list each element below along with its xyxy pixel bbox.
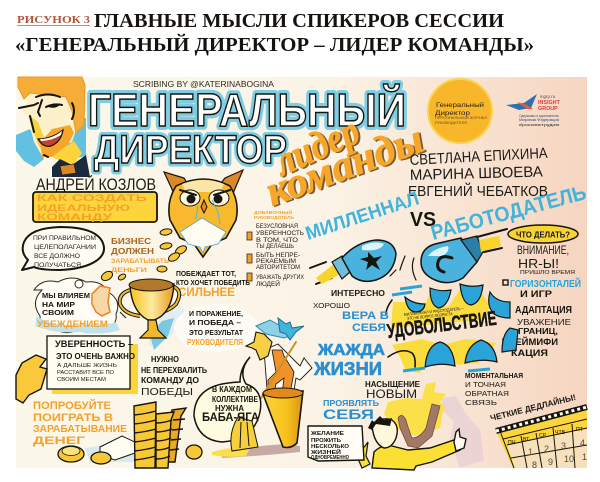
heading: clear deadlines: ЧЕТКИЕ ДЕДЛАЙНЫ! <box>489 391 577 423</box>
oval label: what to do <box>508 225 578 243</box>
speakers names <box>408 145 548 200</box>
word cloud: values: ЖАЖДА <box>317 342 385 359</box>
heading: ГЕНЕРАЛЬНЫЙ ДИРЕКТОР: ДИРЕКТОР <box>94 128 287 172</box>
thought bubble: beliefs: НА МИР <box>42 300 75 309</box>
illustration: calendar: 1 <box>528 447 533 457</box>
logo: Insight Group: INSIGHT <box>538 100 561 106</box>
list: what a leader does: УВЕРЕННОСТЬ <box>256 230 304 237</box>
script heading: лидер команды: команды <box>262 117 431 216</box>
heading: миллениал vs работодатель: МИЛЛЕННАЛ <box>303 188 422 245</box>
list: attention HR: И ИГР <box>520 288 552 299</box>
list: what a leader does: БЫТЬ НЕПРЕ- <box>256 252 300 259</box>
illustration: trophy <box>120 279 184 350</box>
list: what a leader does: РЕКАЕМЫМ <box>256 258 296 265</box>
text: business must earn: БИЗНЕС <box>111 237 151 246</box>
note: confidence <box>47 336 138 394</box>
logo: Insight Group <box>506 94 561 127</box>
heading: ГЕНЕРАЛЬНЫЙ ДИРЕКТОР <box>88 84 406 172</box>
oval label: what to do: ЧТО ДЕЛАТЬ? <box>516 230 570 240</box>
list: what a leader does: БЕЗУСЛОВНАЯ <box>256 223 298 230</box>
speakers names: СВЕТЛАНА ЕПИХИНА <box>409 145 548 169</box>
speech bubble: every team needs Baba Yaga: НУЖНА <box>215 404 244 413</box>
note: confidence: РАССТАВИТ ВСЕ ПО <box>57 370 114 376</box>
word cloud: values: СЕБЯ <box>323 406 374 422</box>
text: try playing <box>33 399 127 447</box>
callout: how to build a team: КОМАНДУ <box>37 212 113 222</box>
title: ГЛАВНЫЕ МЫСЛИ СПИКЕРОВ СЕССИИ <box>94 10 504 32</box>
list: attention HR: КАЦИЯ <box>511 348 548 358</box>
text: don't over-praise: КОМАНДУ ДО <box>141 376 199 385</box>
list: attention HR: ПРИШЛО ВРЕМЯ <box>520 270 575 276</box>
text: instant feedback: МОМЕНТАЛЬНАЯ <box>465 373 523 380</box>
list: what a leader does: В ТОМ, ЧТО <box>256 237 298 244</box>
text: try playing: ДЕНЕГ <box>33 435 86 447</box>
illustration: coin stacks and cards <box>58 402 202 468</box>
note: confidence: УВЕРЕННОСТЬ – <box>55 338 133 349</box>
list: attention HR: УВАЖЕНИЕ <box>517 317 571 327</box>
badge: journal logo: ПЕРСОНАЛЬНЫЙ ЖУРНАЛ <box>435 116 487 120</box>
speech bubble: every team needs Baba Yaga <box>194 357 261 451</box>
illustration: calendar: 8 <box>532 460 537 470</box>
illustration: owl <box>164 170 243 257</box>
list: attention HR: HR-Ы! <box>518 256 559 271</box>
speech bubble: many lives: ЖИЗНЕЙ <box>310 448 341 456</box>
word cloud: values: СЕБЯ <box>352 322 386 334</box>
illustration: calendar: 10 <box>564 454 574 464</box>
word cloud: values: ВЕРА В <box>342 310 389 322</box>
list: what a leader does: ТЫ ДЕЛАЕШЬ <box>256 243 294 250</box>
illustration: calendar: 3 <box>561 441 566 451</box>
illustration: calendar: 4 <box>580 438 585 448</box>
illustration: pleasure burst: ЭТО НЕ ВОПРОС ВОЗРАСТА <box>407 311 453 321</box>
thought bubble: beliefs: УБЕЖДЕНИЕМ <box>37 319 108 330</box>
text: don't over-praise: ПОБЕДЫ <box>141 387 193 398</box>
thought bubble: beliefs: СВОИМ <box>42 308 74 317</box>
title <box>15 10 534 56</box>
text: try playing: ПОИГРАТЬ В <box>33 412 113 424</box>
list: attention HR: ГОРИЗОНТАЛЕЙ <box>510 277 581 290</box>
speech bubble: goal setting <box>22 227 104 270</box>
heading: миллениал vs работодатель: VS <box>410 209 436 231</box>
heading: миллениал vs работодатель: РАБОТОДАТЕЛЬ <box>428 181 589 245</box>
illustration: calendar: ПН <box>508 440 516 446</box>
illustration: Baba Yaga <box>212 318 312 458</box>
logo: Insight Group: Мировая Федерация <box>519 118 559 122</box>
word cloud: values: ПРОЯВЛЯТЬ <box>323 398 379 408</box>
thought bubble: beliefs <box>34 278 126 334</box>
list: what a leader does: УВАЖАТЬ ДРУГИХ <box>256 274 305 281</box>
text: try playing: ПОПРОБУЙТЕ <box>33 399 111 412</box>
speech bubble: goal setting: ПРИ ПРАВИЛЬНОМ <box>33 235 96 242</box>
text: instant feedback <box>465 373 523 407</box>
list: what a leader does: ДОБАВОЧНЫЙ <box>254 208 293 216</box>
credit: SCRIBING BY @KATERINABOGINA <box>133 80 275 89</box>
illustration: calendar <box>496 407 587 470</box>
illustration: pointing arm <box>16 355 47 403</box>
speech bubble: many lives: ЖЕЛАНИЕ <box>310 431 344 437</box>
text: defeat and victory: И ПОБЕДА – <box>189 318 241 327</box>
text: defeat and victory: РУКОВОДИТЕЛЯ <box>187 337 243 347</box>
illustration: calendar: 1 <box>582 452 587 462</box>
text: business must earn <box>111 237 169 274</box>
word cloud: values: ИНТЕРЕСНО <box>331 288 385 298</box>
speech bubble: many lives: НЕСКОЛЬКО <box>311 444 350 450</box>
badge: journal logo: РУКОВОДИТЕЛЯ <box>435 121 468 125</box>
heading: ГЕНЕРАЛЬНЫЙ ДИРЕКТОР: ДИРЕКТОР <box>94 128 287 172</box>
text: defeat and victory: И ПОРАЖЕНИЕ, <box>189 309 243 318</box>
title: «ГЕНЕРАЛЬНЫЙ ДИРЕКТОР – ЛИДЕР КОМАНДЫ» <box>15 33 534 56</box>
text: instant feedback: И ТОЧНАЯ <box>465 382 506 389</box>
speech bubble: goal setting: ПОЛУЧАТЬСЯ <box>34 262 81 269</box>
speakers names: МАРИНА ШВОЕВА <box>410 164 543 184</box>
text: instant feedback: ОБРАТНАЯ <box>465 391 509 398</box>
illustration: boxing gloves <box>310 229 507 284</box>
list: what a leader does: АВТОРИТЕТОМ <box>256 264 300 271</box>
text: the winner: КТО ХОЧЕТ ПОБЕДИТЬ <box>176 280 250 287</box>
text: don't over-praise: НЕ ПЕРЕХВАЛИТЬ <box>141 366 207 375</box>
list: attention HR: ВНИМАНИЕ, <box>517 243 569 257</box>
list: attention HR <box>503 243 581 358</box>
logo: Insight Group: ingrp.ru <box>540 94 556 99</box>
illustration: cheering man <box>356 382 484 470</box>
icon: floating coins <box>100 228 188 282</box>
word cloud: values: ЖИЗНИ <box>313 359 382 379</box>
note: confidence: А ДАЛЬШЕ ЖИЗНЬ <box>57 363 118 369</box>
heading: ГЕНЕРАЛЬНЫЙ ДИРЕКТОР: ГЕНЕРАЛЬНЫЙ <box>88 84 406 136</box>
text: the winner <box>176 271 250 299</box>
illustration: man portrait <box>16 77 90 177</box>
script heading: лидер команды: команды <box>260 116 430 215</box>
text: defeat and victory <box>174 304 258 352</box>
list: attention HR: ГРАНИЦ, <box>518 326 558 336</box>
list: what a leader does: ЛЮДЕЙ <box>256 279 280 288</box>
text: business must earn: ДЕНЬГИ <box>111 267 148 274</box>
panel: graphic recording poster <box>16 77 589 470</box>
word cloud: values: ХОРОШО <box>313 301 350 310</box>
note: confidence: ЭТО ОЧЕНЬ ВАЖНО <box>56 351 135 361</box>
illustration: pleasure burst: МИЛЛЕННИАЛ И РАБОТОДАТЕЛЬ – <box>404 306 464 317</box>
text: business must earn: ДОЛЖЕН <box>111 247 154 256</box>
word cloud: values: НАСЫЩЕНИЕ <box>365 380 421 389</box>
speech bubble: many lives <box>308 426 364 461</box>
badge: journal logo <box>428 79 492 143</box>
illustration: pleasure burst: УДОВОЛЬСТВИЕ <box>386 308 498 343</box>
list: attention HR: АДАПТАЦИЯ <box>515 305 572 316</box>
heading: миллениал vs работодатель <box>303 181 589 245</box>
text: instant feedback: СВЯЗЬ <box>465 400 498 407</box>
speech bubble: every team needs Baba Yaga: В КАЖДОМ <box>212 385 252 394</box>
speech bubble: every team needs Baba Yaga: КОЛЛЕКТИВЕ <box>212 395 258 404</box>
badge: journal logo: Директор <box>435 110 470 117</box>
illustration: pleasure burst <box>386 284 518 373</box>
thought bubble: beliefs: МЫ ВЛИЯЕМ <box>42 291 90 300</box>
illustration: calendar: ВТ <box>523 437 530 443</box>
text: don't over-praise <box>141 355 207 398</box>
speakers names: ЕВГЕНИЙ ЧЕБАТКОВ <box>408 182 548 200</box>
speech bubble: many lives: ОДНОВРЕМЕННО <box>311 455 349 461</box>
logo: Insight Group: Одержимы и вдохновлены <box>519 114 560 118</box>
list: attention HR: ГЕЙМИФИ <box>510 336 558 347</box>
speech bubble: many lives: ПРОЖИТЬ <box>311 438 341 444</box>
list: what a leader does <box>247 208 305 288</box>
script heading: лидер команды: лидер <box>268 108 368 186</box>
callout: how to build a team: КАК СОЗДАТЬ <box>37 193 148 203</box>
text: don't over-praise: НУЖНО <box>151 355 179 364</box>
speech bubble: goal setting: ЦЕЛЕПОЛАГАНИИ <box>34 244 96 251</box>
text: the winner: ПОБЕЖДАЕТ ТОТ, <box>176 271 236 278</box>
illustration: calendar: 9 <box>548 457 553 467</box>
illustration: calendar: 2 <box>544 444 549 454</box>
illustration: calendar: ПТ <box>576 427 584 433</box>
speech bubble: goal setting: ВСЕ ДОЛЖНО <box>34 253 80 260</box>
badge: journal logo: Генеральный <box>436 101 484 109</box>
word cloud: values: НОВЫМ <box>366 387 417 401</box>
script heading: лидер команды: лидер <box>266 107 366 185</box>
text: the winner: СИЛЬНЕЕ <box>178 285 235 299</box>
illustration: calendar: СР <box>539 433 547 439</box>
heading: ГЕНЕРАЛЬНЫЙ ДИРЕКТОР: ГЕНЕРАЛЬНЫЙ <box>88 84 406 136</box>
text: defeat and victory: ЭТО РЕЗУЛЬТАТ <box>189 328 243 337</box>
figure caption label: РИСУНОК 3 <box>17 15 90 26</box>
list: what a leader does: РУКОВОДИТЕЛЬ <box>254 215 295 221</box>
note: confidence: СВОИМ МЕСТАМ <box>57 377 106 383</box>
callout: how to build a team <box>33 192 157 222</box>
word cloud: values <box>313 288 421 422</box>
illustration: calendar: ЧТВ <box>555 430 566 436</box>
logo: Insight Group: GROUP <box>538 106 558 112</box>
callout: how to build a team: ИДЕАЛЬНУЮ <box>37 203 130 213</box>
text: try playing: ЗАРАБАТЫВАНИЕ <box>33 424 127 435</box>
logo: Insight Group: #россияструдом <box>519 123 560 127</box>
text: business must earn: ЗАРАБАТЫВАТЬ <box>111 258 169 265</box>
speaker name: Андрей Козлов: АНДРЕЙ КОЗЛОВ <box>36 175 156 194</box>
speech bubble: every team needs Baba Yaga: БАБА-ЯГА <box>202 410 259 424</box>
